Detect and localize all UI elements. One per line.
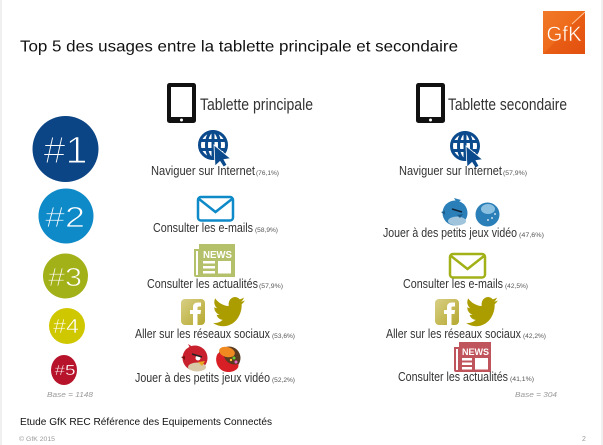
right item 4: réseaux sociaux xyxy=(386,297,546,341)
left item 5: jeux vidéo: (52,2%) xyxy=(272,377,295,384)
left item 5: jeux vidéo xyxy=(135,344,295,385)
left item 2: e-mails: (58,9%) xyxy=(255,227,278,234)
column header: tablette secondaire xyxy=(416,83,567,123)
icon: red bird xyxy=(181,344,208,372)
left item 3: actualités: Consulter les actualités xyxy=(147,277,258,291)
icon: facebook xyxy=(435,299,459,325)
rank badge #5: #5 xyxy=(54,362,76,379)
icon: envelope xyxy=(450,254,485,278)
rank badge #1: #1 xyxy=(44,130,88,172)
icon: twitter xyxy=(466,297,498,326)
heading: Tablette secondaire xyxy=(448,96,567,114)
rank badge #2: #2 xyxy=(45,202,85,234)
rank badge #3 xyxy=(43,254,88,298)
heading: Tablette principale xyxy=(200,96,313,114)
logo: GfK xyxy=(543,11,585,54)
icon: newspaper: NEWS xyxy=(462,347,489,358)
left item 3: actualités xyxy=(147,244,283,291)
right item 3: e-mails: Consulter les e-mails xyxy=(403,277,503,291)
icon: envelope xyxy=(198,197,233,220)
icon: newspaper: NEWS xyxy=(203,250,232,261)
right item 2: jeux vidéo xyxy=(383,198,544,240)
right item 3: e-mails: (42,5%) xyxy=(505,283,528,290)
column header: tablette principale xyxy=(167,83,313,123)
rank badge #3: #3 xyxy=(48,262,82,292)
left item 3: actualités: (57,9%) xyxy=(259,283,283,290)
rank badge #5 xyxy=(51,355,77,385)
icon: candy xyxy=(216,345,240,372)
icon: globe cursor xyxy=(200,132,230,167)
right item 5: actualités xyxy=(398,342,534,384)
rank badge #4: #4 xyxy=(53,316,79,338)
icon: tablet xyxy=(167,83,196,123)
left item 5: jeux vidéo: Jouer à des petits jeux vidéo xyxy=(135,371,270,385)
right item 4: réseaux sociaux: (42,2%) xyxy=(523,333,546,340)
right item 2: jeux vidéo: (47,6%) xyxy=(519,232,544,239)
right item 5: actualités: (41,1%) xyxy=(510,376,534,383)
title: Top 5 des usages entre la tablette principale et secondaire xyxy=(20,38,458,56)
copyright: © GfK 2015 xyxy=(19,435,55,443)
base right: Base = 304 xyxy=(515,390,557,399)
left item 2: e-mails: Consulter les e-mails xyxy=(153,221,253,235)
right item 1: naviguer xyxy=(399,132,527,178)
left item 1: naviguer xyxy=(151,132,279,178)
icon: globe cursor xyxy=(452,132,482,168)
icon: blue bird xyxy=(441,198,468,226)
left item 4: réseaux sociaux xyxy=(135,297,295,341)
rank badge #1 xyxy=(32,116,98,182)
left item 4: réseaux sociaux: (53,6%) xyxy=(272,333,295,340)
left item 1: naviguer: Naviguer sur Internet xyxy=(151,164,255,178)
right item 1: naviguer: Naviguer sur Internet xyxy=(399,164,502,178)
page number: 2 xyxy=(582,436,586,443)
right item 3: e-mails xyxy=(403,254,528,291)
rank badge #4 xyxy=(49,308,85,344)
right item 5: actualités: Consulter les actualités xyxy=(398,370,508,384)
icon: tablet xyxy=(416,83,445,123)
left item 4: réseaux sociaux: Aller sur les réseaux sociaux xyxy=(135,327,271,341)
right item 2: jeux vidéo: Jouer à des petits jeux vidéo xyxy=(383,226,517,240)
logo: GfK: GfK xyxy=(546,23,582,46)
right item 4: réseaux sociaux: Aller sur les réseaux sociaux xyxy=(386,327,522,341)
source note: Etude GfK REC Référence des Equipements Connectés xyxy=(20,416,272,428)
rank badge #2 xyxy=(38,188,94,244)
right item 1: naviguer: (57,9%) xyxy=(503,170,527,177)
base left: Base = 1148 xyxy=(47,390,94,399)
icon: blue candy xyxy=(476,202,500,226)
icon: facebook xyxy=(181,299,205,325)
icon: twitter xyxy=(213,297,245,326)
left item 1: naviguer: (76,1%) xyxy=(256,170,279,177)
left item 2: e-mails xyxy=(153,197,278,235)
